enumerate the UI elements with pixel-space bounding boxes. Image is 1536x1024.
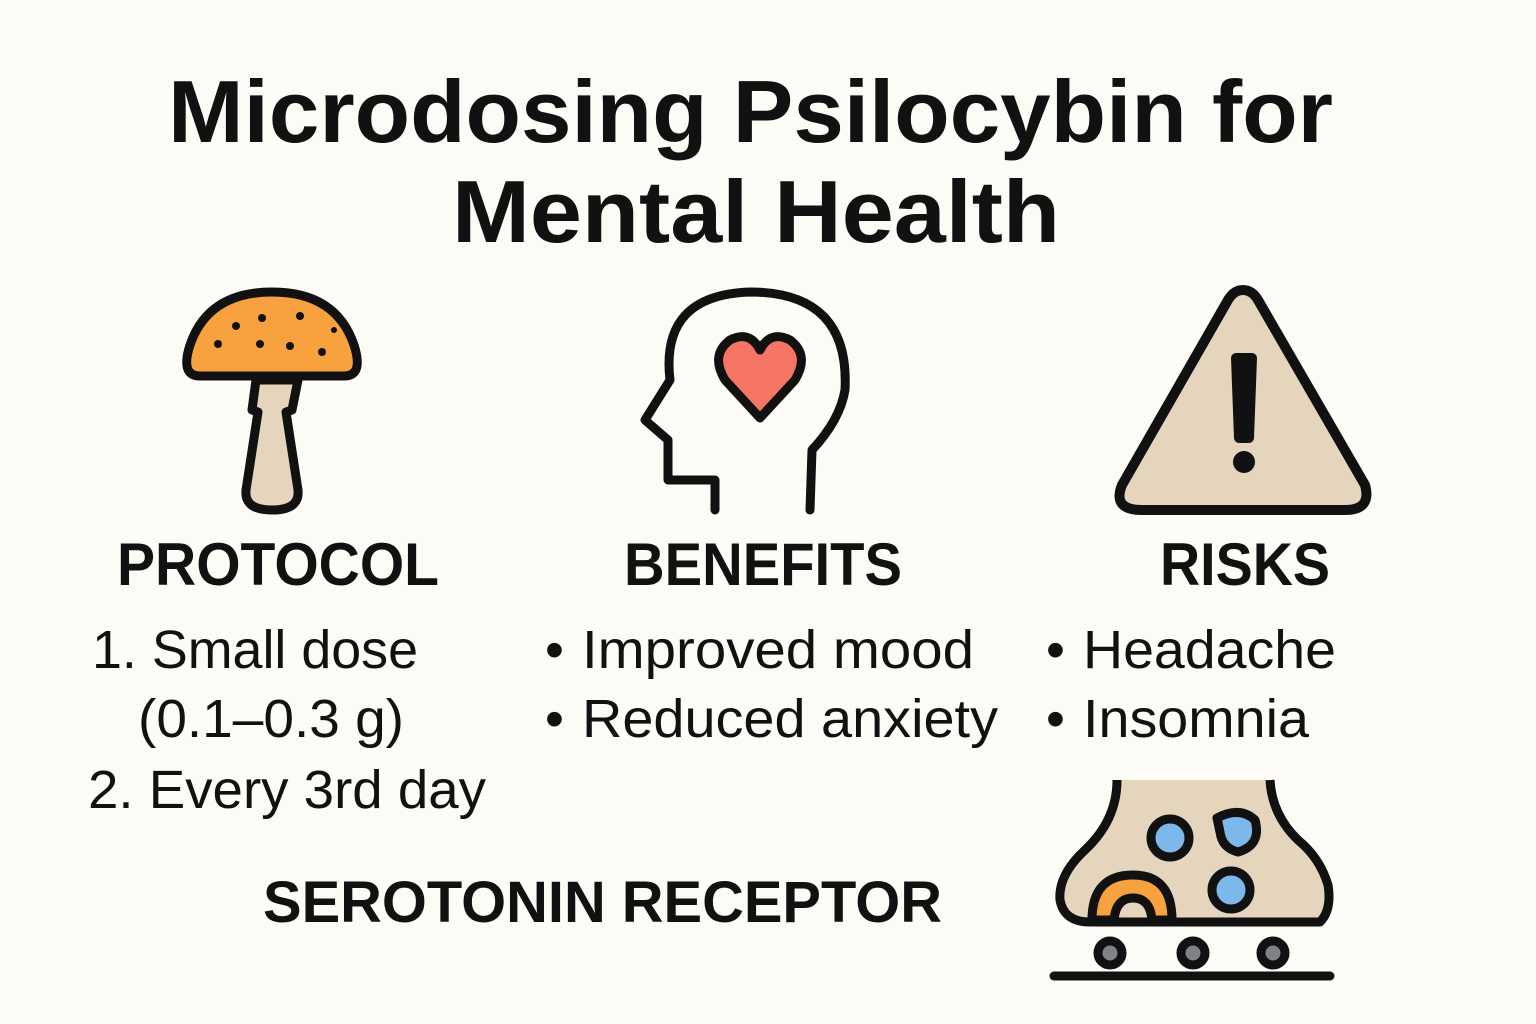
text: risks list: • <box>1046 620 1065 680</box>
title: Microdosing Psilocybin for <box>168 62 1333 161</box>
text: benefits list: Reduced anxiety <box>582 689 998 749</box>
text: benefits list: • <box>545 689 564 749</box>
text: protocol list: (0.1–0.3 g) <box>138 689 404 749</box>
text: protocol list: 1. Small dose <box>92 620 418 680</box>
heading: benefits: BENEFITS <box>624 531 902 598</box>
text: protocol list <box>88 620 486 820</box>
heading: risks: RISKS <box>1160 531 1330 598</box>
text: benefits list: Improved mood <box>582 620 974 680</box>
title: Mental Health <box>452 162 1060 261</box>
text: protocol list: 2. Every 3rd day <box>88 760 486 820</box>
icon: mushroom <box>187 292 357 510</box>
title <box>168 62 1333 261</box>
heading: protocol: PROTOCOL <box>117 531 439 598</box>
text: risks list <box>1046 620 1336 749</box>
icon: head with heart <box>645 292 845 510</box>
icon: warning triangle <box>1120 290 1366 510</box>
text: benefits list <box>545 620 998 749</box>
text: risks list: Insomnia <box>1083 689 1310 749</box>
text: risks list: Headache <box>1083 620 1336 680</box>
text: risks list: • <box>1046 689 1065 749</box>
heading: serotonin receptor: SEROTONIN RECEPTOR <box>263 870 942 935</box>
icon: synapse receptor <box>1054 780 1330 976</box>
text: benefits list: • <box>545 620 564 680</box>
